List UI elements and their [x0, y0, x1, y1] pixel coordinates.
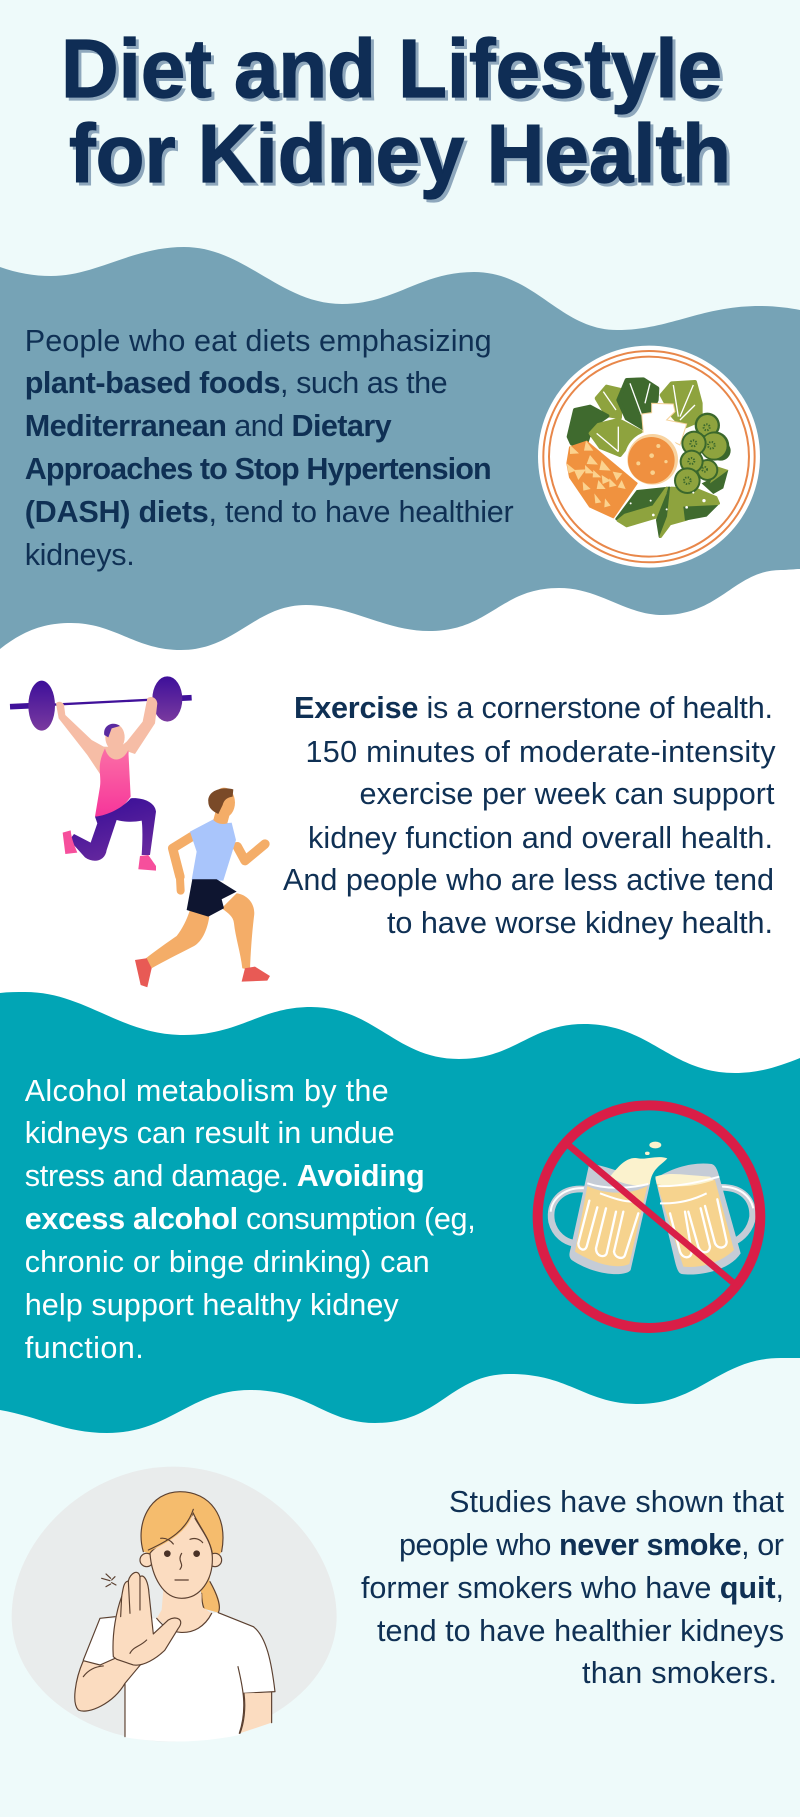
text block: alcohol: function.	[25, 1331, 144, 1365]
text block: plant-based diets: People who eat diets emphasizing	[25, 324, 492, 358]
panel: smoking background wave	[0, 1358, 800, 1817]
text block: alcohol: stress and damage. Avoiding	[25, 1159, 425, 1193]
text block: plant-based diets: plant-based foods, such as the	[25, 366, 448, 400]
icon: woman lifting barbell	[10, 676, 192, 871]
icon: plate of salad with dipping bowl	[538, 346, 760, 568]
panel: exercise background wave	[0, 569, 800, 1100]
text block: smoking: tend to have healthier kidneys	[377, 1614, 784, 1648]
text block: plant-based diets	[25, 324, 514, 572]
title: Diet and Lifestyle	[61, 22, 722, 115]
text block: smoking: people who never smoke, or	[399, 1528, 784, 1562]
hair and ponytail	[141, 1492, 223, 1613]
panel: plant-based diet background wave	[0, 247, 800, 700]
text block: smoking	[361, 1485, 784, 1690]
t-shirt	[83, 1613, 275, 1742]
text block: smoking: than smokers.	[582, 1656, 777, 1690]
text block: plant-based diets: Approaches to Stop Hypertension	[25, 452, 492, 486]
text block: alcohol	[25, 1074, 476, 1365]
text block: exercise: Exercise is a cornerstone of health.	[294, 691, 773, 725]
title: for Kidney Health	[69, 107, 731, 200]
text block: smoking: former smokers who have quit,	[361, 1571, 784, 1605]
text block: exercise	[283, 691, 776, 940]
barbell	[10, 676, 192, 731]
text block: plant-based diets: Mediterranean and Dietary	[25, 409, 392, 443]
title	[61, 22, 731, 200]
panel: alcohol background wave	[0, 992, 800, 1500]
text block: alcohol: help support healthy kidney	[25, 1288, 399, 1322]
text block: alcohol: Alcohol metabolism by the	[25, 1074, 389, 1108]
text block: exercise: exercise per week can support	[360, 777, 775, 811]
text block: alcohol: chronic or binge drinking) can	[25, 1245, 430, 1279]
text block: plant-based diets: kidneys.	[25, 538, 135, 572]
text block: exercise: kidney function and overall health.	[308, 821, 773, 855]
icon: no alcohol sign with beer mugs	[538, 1105, 760, 1328]
text block: plant-based diets: (DASH) diets, tend to have healthier	[25, 495, 514, 529]
text block: smoking: Studies have shown that	[449, 1485, 784, 1519]
text block: exercise: 150 minutes of moderate-intensity	[306, 735, 776, 769]
text block: alcohol: kidneys can result in undue	[25, 1116, 395, 1150]
text block: alcohol: excess alcohol consumption (eg,	[25, 1202, 476, 1236]
text block: exercise: to have worse kidney health.	[387, 906, 773, 940]
icon: man running	[135, 788, 270, 987]
text block: exercise: And people who are less active tend	[283, 863, 774, 897]
icon: woman raising hand to refuse smoking	[12, 1467, 337, 1742]
